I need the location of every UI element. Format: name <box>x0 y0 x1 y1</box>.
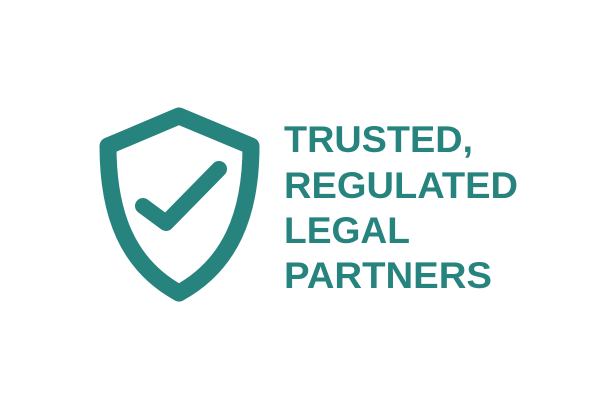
icon: shield with checkmark <box>108 116 251 293</box>
checkmark <box>143 169 219 223</box>
title text: PARTNERS <box>284 255 492 296</box>
title text <box>284 119 518 296</box>
shield outline <box>108 116 251 293</box>
title text: REGULATED <box>284 165 518 206</box>
title text: TRUSTED, <box>284 119 473 160</box>
title text: LEGAL <box>284 210 410 251</box>
